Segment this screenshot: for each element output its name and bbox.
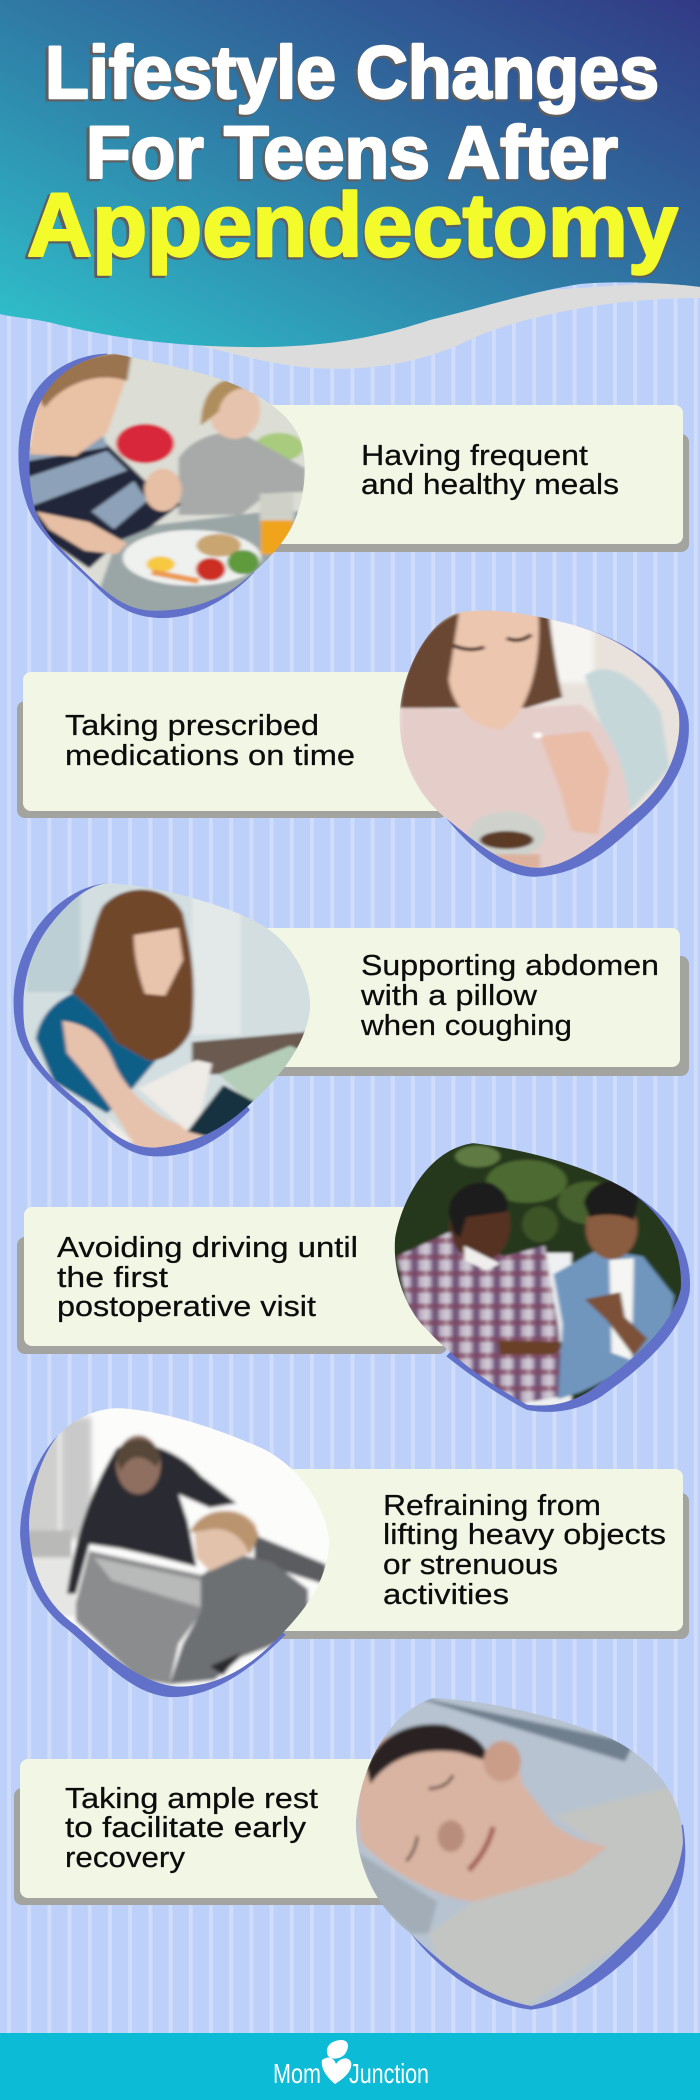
- photo blob: sleeping boy: [353, 1693, 687, 2010]
- text: medications: Taking prescribed: [65, 710, 319, 742]
- photo blob: girl with pillow: [14, 878, 317, 1156]
- photo blob: kids eating: [18, 347, 312, 626]
- card: [24, 1207, 454, 1346]
- text: pillow: when coughing: [360, 1010, 572, 1042]
- text: meals: [361, 440, 619, 501]
- card shadow: [14, 1788, 444, 1905]
- title line 2: For Teens After: [83, 113, 617, 196]
- photo blob: lifting sofa: [20, 1404, 335, 1697]
- card shadow: [17, 1237, 447, 1354]
- photo blob: father and son talking: [388, 1139, 690, 1412]
- logo: MomJunction: [273, 2040, 429, 2089]
- text: meals: and healthy meals: [361, 469, 619, 501]
- title line 3: Appendectomy: [24, 178, 678, 278]
- text: lifting: activities: [383, 1579, 509, 1611]
- text: pillow: Supporting abdomen: [361, 950, 659, 982]
- text: lifting: lifting heavy objects: [383, 1519, 666, 1551]
- text: pillow: with a pillow: [360, 980, 538, 1012]
- card shadow: [240, 956, 689, 1076]
- panel: avoiding driving: [17, 1139, 690, 1412]
- text: rest: to facilitate early: [65, 1812, 307, 1844]
- grey wave under header: [170, 280, 700, 369]
- text: driving: postoperative visit: [57, 1291, 316, 1323]
- panel: refraining from lifting: [20, 1404, 689, 1697]
- card shadow: [240, 1493, 689, 1639]
- text: rest: recovery: [65, 1842, 186, 1874]
- logo wordmark Junction: Junction: [349, 2058, 429, 2089]
- card shadow: [240, 434, 689, 552]
- card: [20, 1759, 450, 1898]
- footer band: [0, 2033, 700, 2100]
- card: [240, 928, 680, 1067]
- header banner: [0, 0, 700, 347]
- title line 3: Appendectomy: [27, 176, 678, 276]
- panel: supporting abdomen: [14, 878, 689, 1156]
- text: rest: [65, 1783, 318, 1874]
- text: driving: the first: [57, 1262, 168, 1294]
- card: [240, 405, 683, 544]
- text: medications: [65, 710, 355, 772]
- text: lifting: or strenuous: [383, 1549, 558, 1581]
- text: meals: Having frequent: [361, 440, 588, 472]
- title line 1: Lifestyle Changes: [45, 31, 659, 114]
- panel: frequent and healthy meals: [18, 347, 689, 626]
- text: driving: Avoiding driving until: [57, 1232, 358, 1264]
- text: lifting: [383, 1490, 666, 1611]
- logo wordmark Mom: Mom: [273, 2058, 321, 2089]
- card shadow: [17, 701, 447, 818]
- panel: prescribed medications: [17, 604, 689, 877]
- photo blob: girl taking pill: [393, 604, 689, 877]
- panel: ample rest: [14, 1693, 687, 2010]
- title line 2: For Teens After: [86, 111, 618, 194]
- logo icon: mother and child heart: [322, 2040, 351, 2084]
- text: pillow: [360, 950, 659, 1042]
- text: rest: Taking ample rest: [65, 1783, 318, 1815]
- title line 1: Lifestyle Changes: [42, 33, 658, 116]
- text: medications: medications on time: [65, 740, 355, 772]
- text: lifting: Refraining from: [383, 1490, 601, 1522]
- card: [23, 672, 453, 811]
- text: driving: [57, 1232, 358, 1323]
- title: [24, 31, 678, 278]
- card: [240, 1469, 683, 1631]
